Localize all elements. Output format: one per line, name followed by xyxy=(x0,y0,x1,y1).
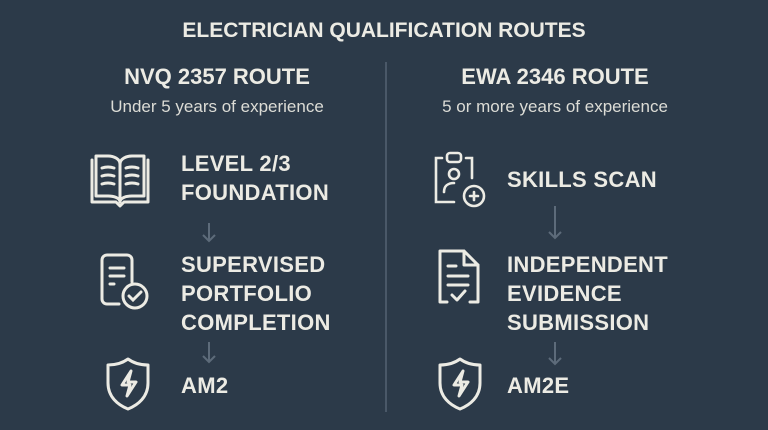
arrow xyxy=(548,342,562,366)
subtitle: EWA: 5 or more years of experience xyxy=(442,97,668,116)
panel: NVQ route xyxy=(90,64,331,410)
step: level 2/3 xyxy=(181,151,329,205)
icon: shield bolt xyxy=(438,358,482,410)
step: independent evidence: INDEPENDENT xyxy=(507,252,668,277)
icon: clipboard person xyxy=(434,152,486,208)
arrow xyxy=(202,342,216,364)
subtitle: NVQ: Under 5 years of experience xyxy=(110,97,324,116)
step: AM2E: AM2E xyxy=(507,373,569,398)
step: supervised portfolio xyxy=(181,252,331,335)
step: AM2: AM2 xyxy=(181,373,228,398)
step: independent evidence xyxy=(507,252,668,335)
icon: document check xyxy=(100,254,148,310)
heading: NVQ: NVQ 2357 ROUTE xyxy=(124,64,310,89)
arrow xyxy=(548,206,562,240)
icon: document file xyxy=(438,250,480,304)
step: level 2/3: FOUNDATION xyxy=(181,180,329,205)
step: independent evidence: EVIDENCE xyxy=(507,281,622,306)
step: level 2/3: LEVEL 2/3 xyxy=(181,151,291,176)
heading: EWA: EWA 2346 ROUTE xyxy=(461,64,649,89)
step: skills scan: SKILLS SCAN xyxy=(507,167,657,192)
step: supervised portfolio: COMPLETION xyxy=(181,310,331,335)
step: independent evidence: SUBMISSION xyxy=(507,310,649,335)
arrow xyxy=(202,223,216,242)
step: supervised portfolio: SUPERVISED xyxy=(181,252,325,277)
title: ELECTRICIAN QUALIFICATION ROUTES xyxy=(182,19,586,42)
icon: book xyxy=(90,154,150,208)
step: supervised portfolio: PORTFOLIO xyxy=(181,281,312,306)
icon: shield bolt xyxy=(106,358,150,410)
panel: EWA route xyxy=(434,64,668,410)
